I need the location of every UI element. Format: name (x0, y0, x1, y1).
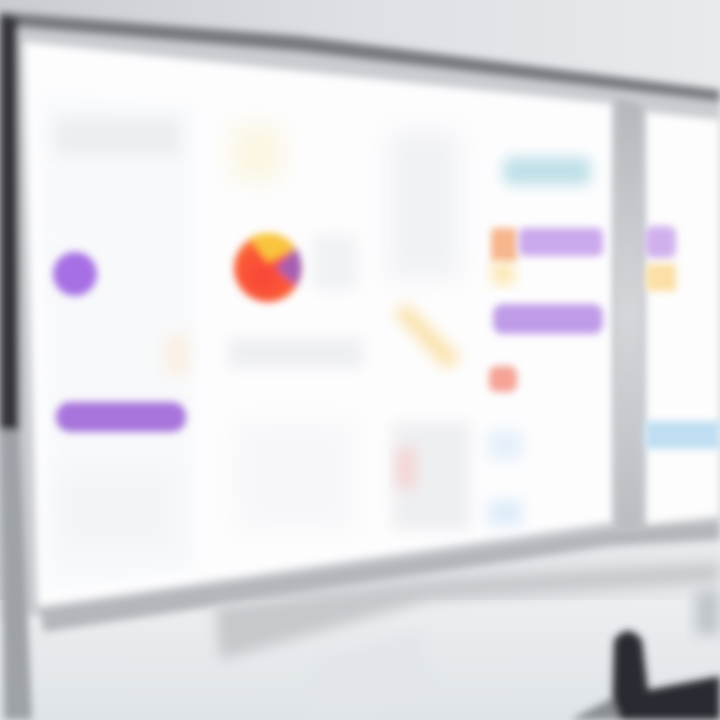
second screen (646, 112, 720, 524)
right panel: tags and buttons (488, 157, 603, 526)
pie chart (234, 233, 302, 302)
purple bar (519, 228, 603, 256)
orange purple tag (491, 228, 517, 262)
blue bar on second screen (645, 421, 720, 449)
blue faint items (488, 430, 522, 460)
small orange accent (165, 335, 189, 375)
stand column (310, 630, 440, 715)
faint lower block (235, 420, 355, 530)
faint lower text (60, 470, 175, 550)
main screen (24, 42, 612, 606)
desk accent right (695, 590, 720, 635)
text block (228, 338, 363, 368)
yellow swatch (492, 264, 514, 284)
lower gray panel (392, 422, 470, 530)
desk surface (0, 600, 720, 720)
pie legend (312, 235, 357, 290)
yellow swatch on second screen (646, 264, 676, 291)
orange diagonal chart (392, 304, 462, 370)
second screen content (645, 226, 720, 449)
purple button 2 (493, 304, 603, 334)
middle panel: pie chart section (228, 125, 363, 530)
red accent in lower panel (396, 448, 416, 488)
left panel: dashboard column (40, 95, 195, 590)
purple bar on second screen (645, 226, 676, 258)
heading placeholder (55, 118, 180, 156)
divider bezel between screens (616, 98, 642, 530)
teal and blue tag (503, 157, 591, 185)
top yellow chart hint (232, 125, 282, 180)
third panel: column of lists (388, 130, 470, 530)
left column panel (40, 95, 195, 590)
stand base slab (215, 562, 720, 660)
purple button (56, 402, 186, 432)
dark object in foreground (570, 631, 720, 720)
purple circle icon (53, 252, 97, 296)
upper gray list (388, 130, 460, 280)
monitor stand and keyboard (215, 562, 720, 715)
red icon (489, 366, 517, 392)
